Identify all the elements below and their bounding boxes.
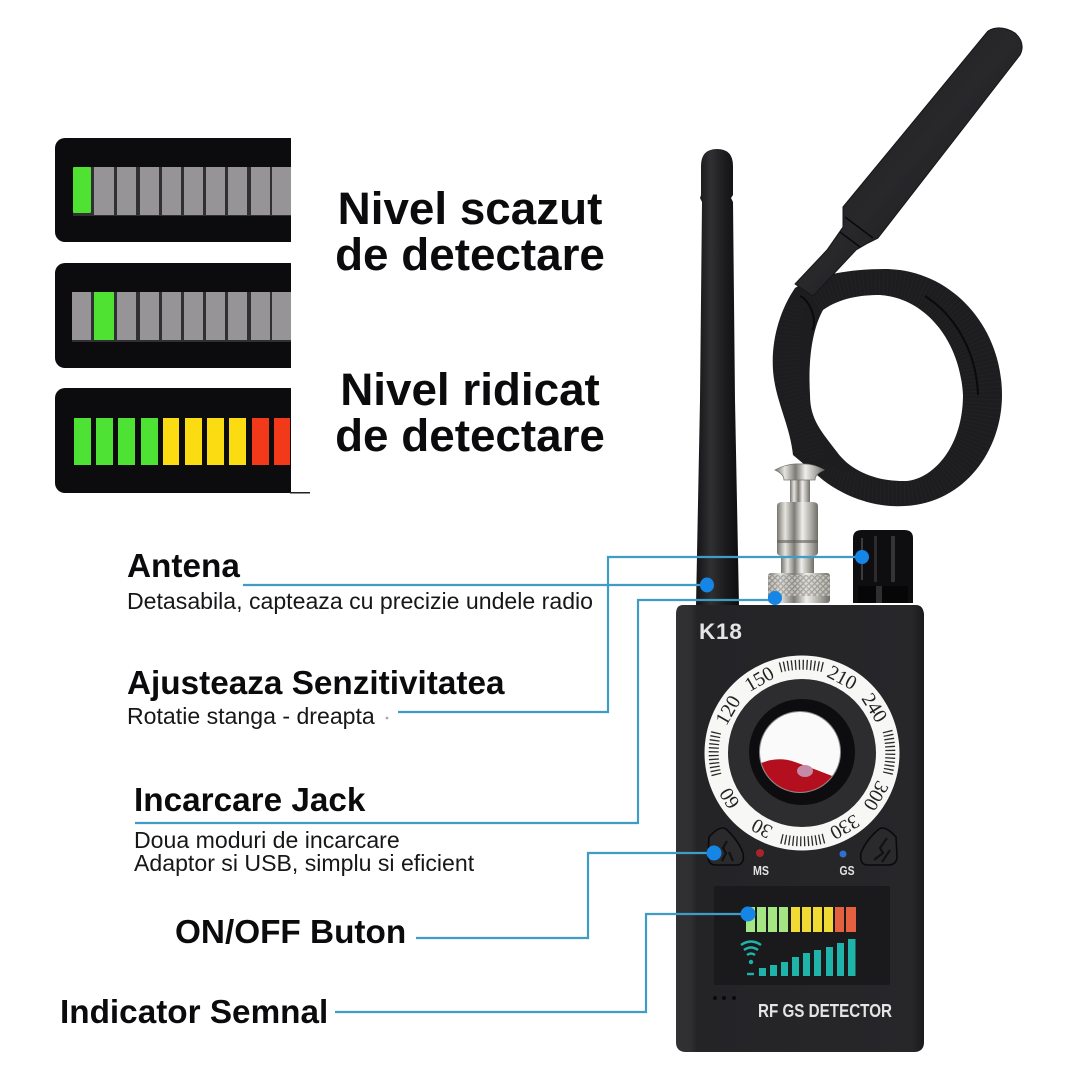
probe: handle tube [795,28,1022,296]
callout text: Ajusteaza Senzitivitatea: Ajusteaza Senzitivitatea [127,665,505,702]
ring numbers: 150 [741,662,778,696]
device: K18 detector illustration [676,28,1022,1052]
indicator: MS led [753,849,769,878]
ring numbers [711,661,893,844]
connector: silver aviation plug [768,464,830,603]
antenna: rubber whip [696,149,739,606]
callout text: ON/OFF Buton: ON/OFF Buton [175,914,406,951]
callout text: Ajusteaza Senzitivitatea [127,665,505,729]
heading: low detection level: Nivel scazut [338,183,602,234]
model label K18: K18 [699,619,743,644]
gauge panel: high level bars [55,380,311,494]
signal strength bars [759,939,856,976]
heading: high detection level: de detectare [335,410,605,461]
ring numbers: 60 [715,784,745,812]
callout text: Incarcare Jack: Incarcare Jack [134,782,366,819]
callout text: Incarcare Jack: Doua moduri de incarcare [134,827,400,853]
leader line: charging jack [135,591,782,823]
product label RF GS DETECTOR: RF GS DETECTOR [758,1001,892,1021]
leader line: antenna [243,578,714,592]
ring numbers: 300 [859,777,893,814]
callout text: Antena [127,548,593,614]
indicator: GS led [840,850,855,878]
gauge panel: low level second bar [55,255,311,375]
speaker dots [713,996,736,1000]
device body [676,605,924,1052]
knob: sensitivity adjuster [853,530,913,603]
level bar row [746,907,856,932]
button: left on/off [708,828,743,865]
gooseneck probe cable [773,269,1002,506]
callout text: Ajusteaza Senzitivitatea: Rotatie stanga - dreapta [127,703,375,729]
button: right mode [861,828,897,865]
ring numbers: 240 [857,689,891,727]
display screen [714,886,890,985]
callout text: Indicator Semnal: Indicator Semnal [60,994,328,1031]
indicator: MS led: MS [753,863,769,878]
leader line: sensitivity knob [398,550,869,712]
heading: low detection level: de detectare [335,229,605,280]
callout text: Antena: Antena [127,548,240,585]
ring numbers: 330 [826,810,863,844]
dial: white degree ring [704,656,900,850]
ring numbers: 210 [823,661,860,695]
leader line: signal indicator [335,906,756,1012]
callout text: Incarcare Jack [134,782,475,876]
gauge panel: low level first bar [55,130,311,250]
ring numbers: 120 [711,692,745,729]
ring numbers: 30 [748,814,776,842]
ring ticks [714,665,890,841]
heading: high detection level: Nivel ridicat [340,364,600,415]
leader line: on/off button [416,846,722,938]
indicator: GS led: GS [840,863,855,878]
lens: red camera detector window [749,699,855,805]
callout text: Incarcare Jack: Adaptor si USB, simplu si eficient [134,850,475,876]
callout text: Antena: Detasabila, capteaza cu precizie undele radio [127,588,593,614]
icon: wifi signal [741,942,761,974]
